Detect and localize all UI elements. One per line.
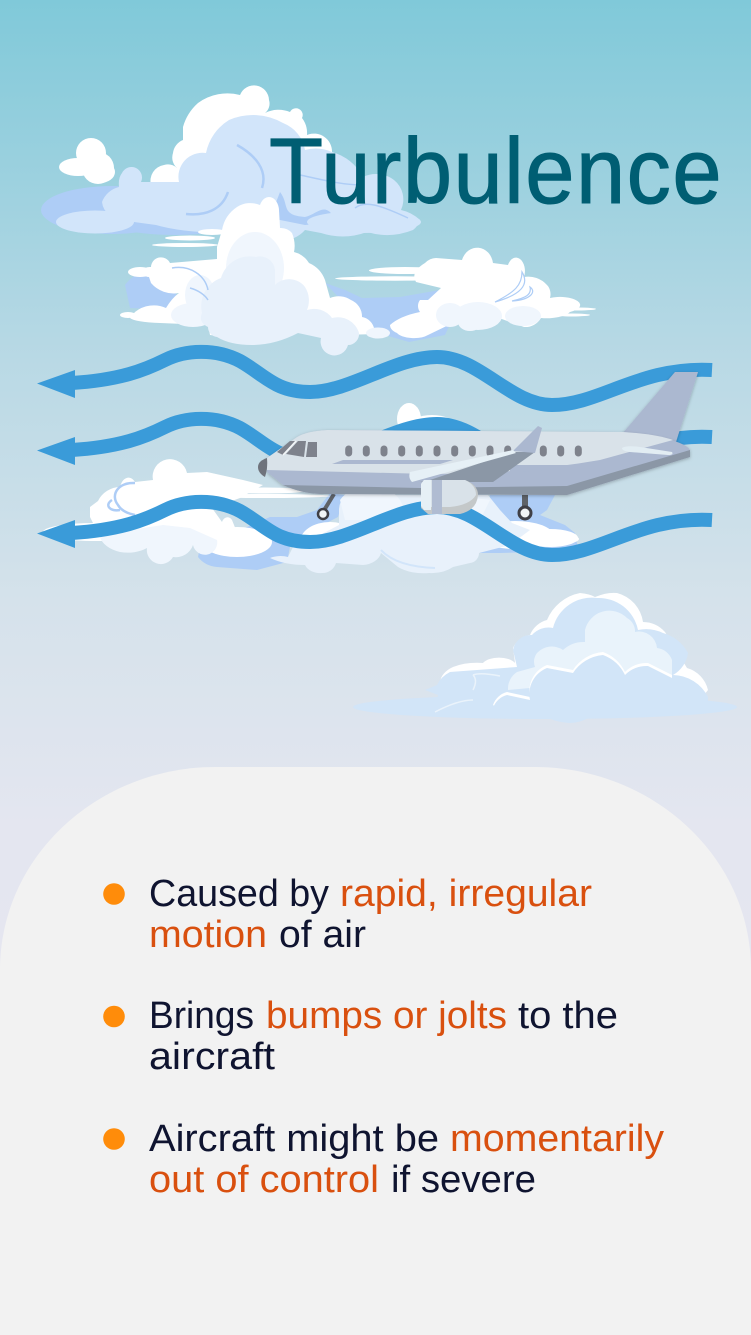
cloud: upper middle (120, 197, 452, 355)
cloud: top large (41, 85, 421, 238)
landing gear (318, 494, 531, 519)
bullet: cause: of air (279, 914, 366, 956)
bullet: effect: bumps or jolts (266, 995, 507, 1037)
bullet: effect: aircraft (149, 1036, 275, 1078)
stabilizer (622, 446, 672, 455)
bullet: effect: Brings (149, 995, 254, 1037)
wing (409, 426, 542, 482)
title: Turbulence (269, 119, 723, 223)
fuselage (258, 430, 690, 495)
bullet: cause: rapid, irregular (340, 873, 592, 915)
engine (421, 480, 478, 514)
bullet: severity (103, 1118, 664, 1201)
air flow arrow: top (37, 352, 712, 405)
cloud: lower right (353, 593, 737, 723)
bullet: severity: if severe (391, 1159, 536, 1201)
bullet: cause (103, 873, 592, 956)
cloud: behind aircraft (43, 403, 579, 573)
cabin windows (345, 446, 582, 456)
bullet: severity: out of control (149, 1159, 379, 1201)
bullet: cause: Caused by (149, 873, 329, 915)
panel: description (0, 767, 751, 1335)
cloud: upper right (335, 248, 596, 338)
bullet: effect: to the (518, 995, 618, 1037)
tail fin (622, 372, 698, 442)
air flow arrow: bottom (37, 502, 712, 555)
bullet: severity: momentarily (450, 1118, 664, 1160)
cloud: top left small (59, 138, 115, 184)
aircraft (258, 372, 698, 519)
bullet: effect (103, 995, 618, 1078)
air flow arrow: middle (37, 419, 712, 472)
bullet: cause: motion (149, 914, 267, 956)
cockpit windows (277, 441, 317, 457)
bullet: severity: Aircraft might be (149, 1118, 439, 1160)
